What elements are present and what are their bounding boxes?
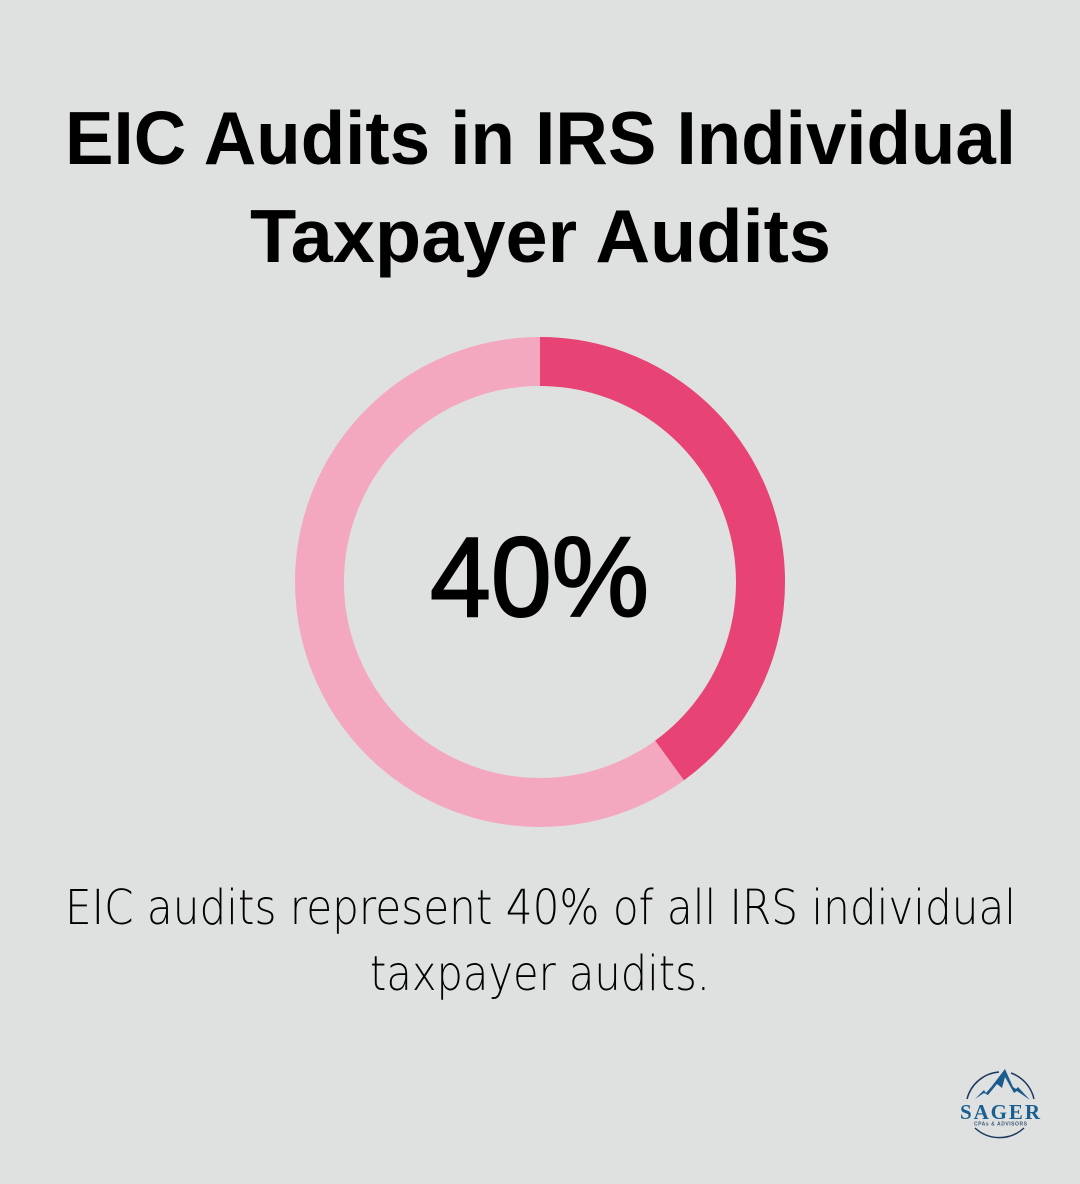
title: Taxpayer Audits <box>250 194 831 278</box>
description <box>65 880 1016 1002</box>
logo: Sager CPAs & Advisors <box>960 1069 1041 1138</box>
title <box>65 96 1016 278</box>
logo name: SAGER <box>960 1100 1041 1124</box>
title: EIC Audits in IRS Individual <box>65 96 1016 180</box>
description: taxpayer audits. <box>370 946 710 1002</box>
donut value: 40% <box>430 514 649 640</box>
logo tagline: CPAs & ADVISORS <box>974 1122 1028 1128</box>
donut chart <box>320 362 761 802</box>
logo ring <box>967 1072 1034 1138</box>
logo mountains <box>975 1069 1030 1100</box>
